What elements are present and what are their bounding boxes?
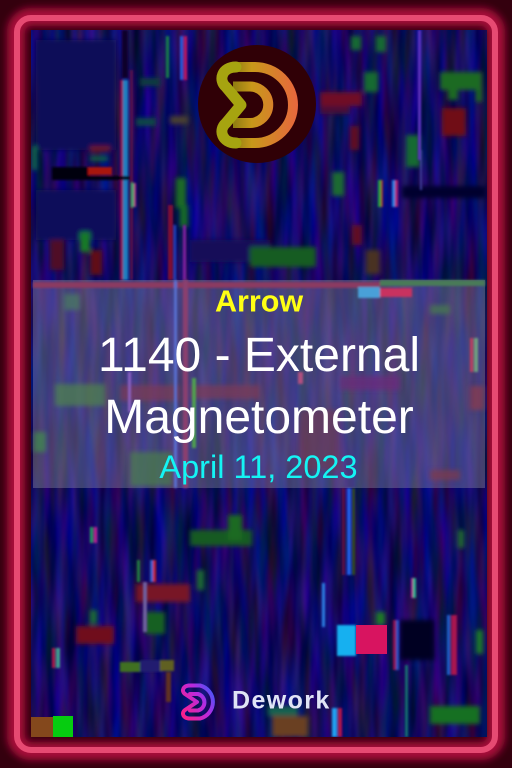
title panel [33, 280, 485, 488]
date: April 11, 2023 [159, 449, 358, 485]
title panel: Magnetometer [104, 391, 414, 444]
heading: 1140 - External [98, 329, 420, 382]
logo mark: D [222, 67, 293, 143]
project name: Arrow [215, 284, 303, 318]
icon: dework logo [183, 686, 213, 718]
dework brand [183, 686, 331, 718]
wordmark: Dework [232, 686, 331, 714]
logo badge [198, 45, 316, 163]
